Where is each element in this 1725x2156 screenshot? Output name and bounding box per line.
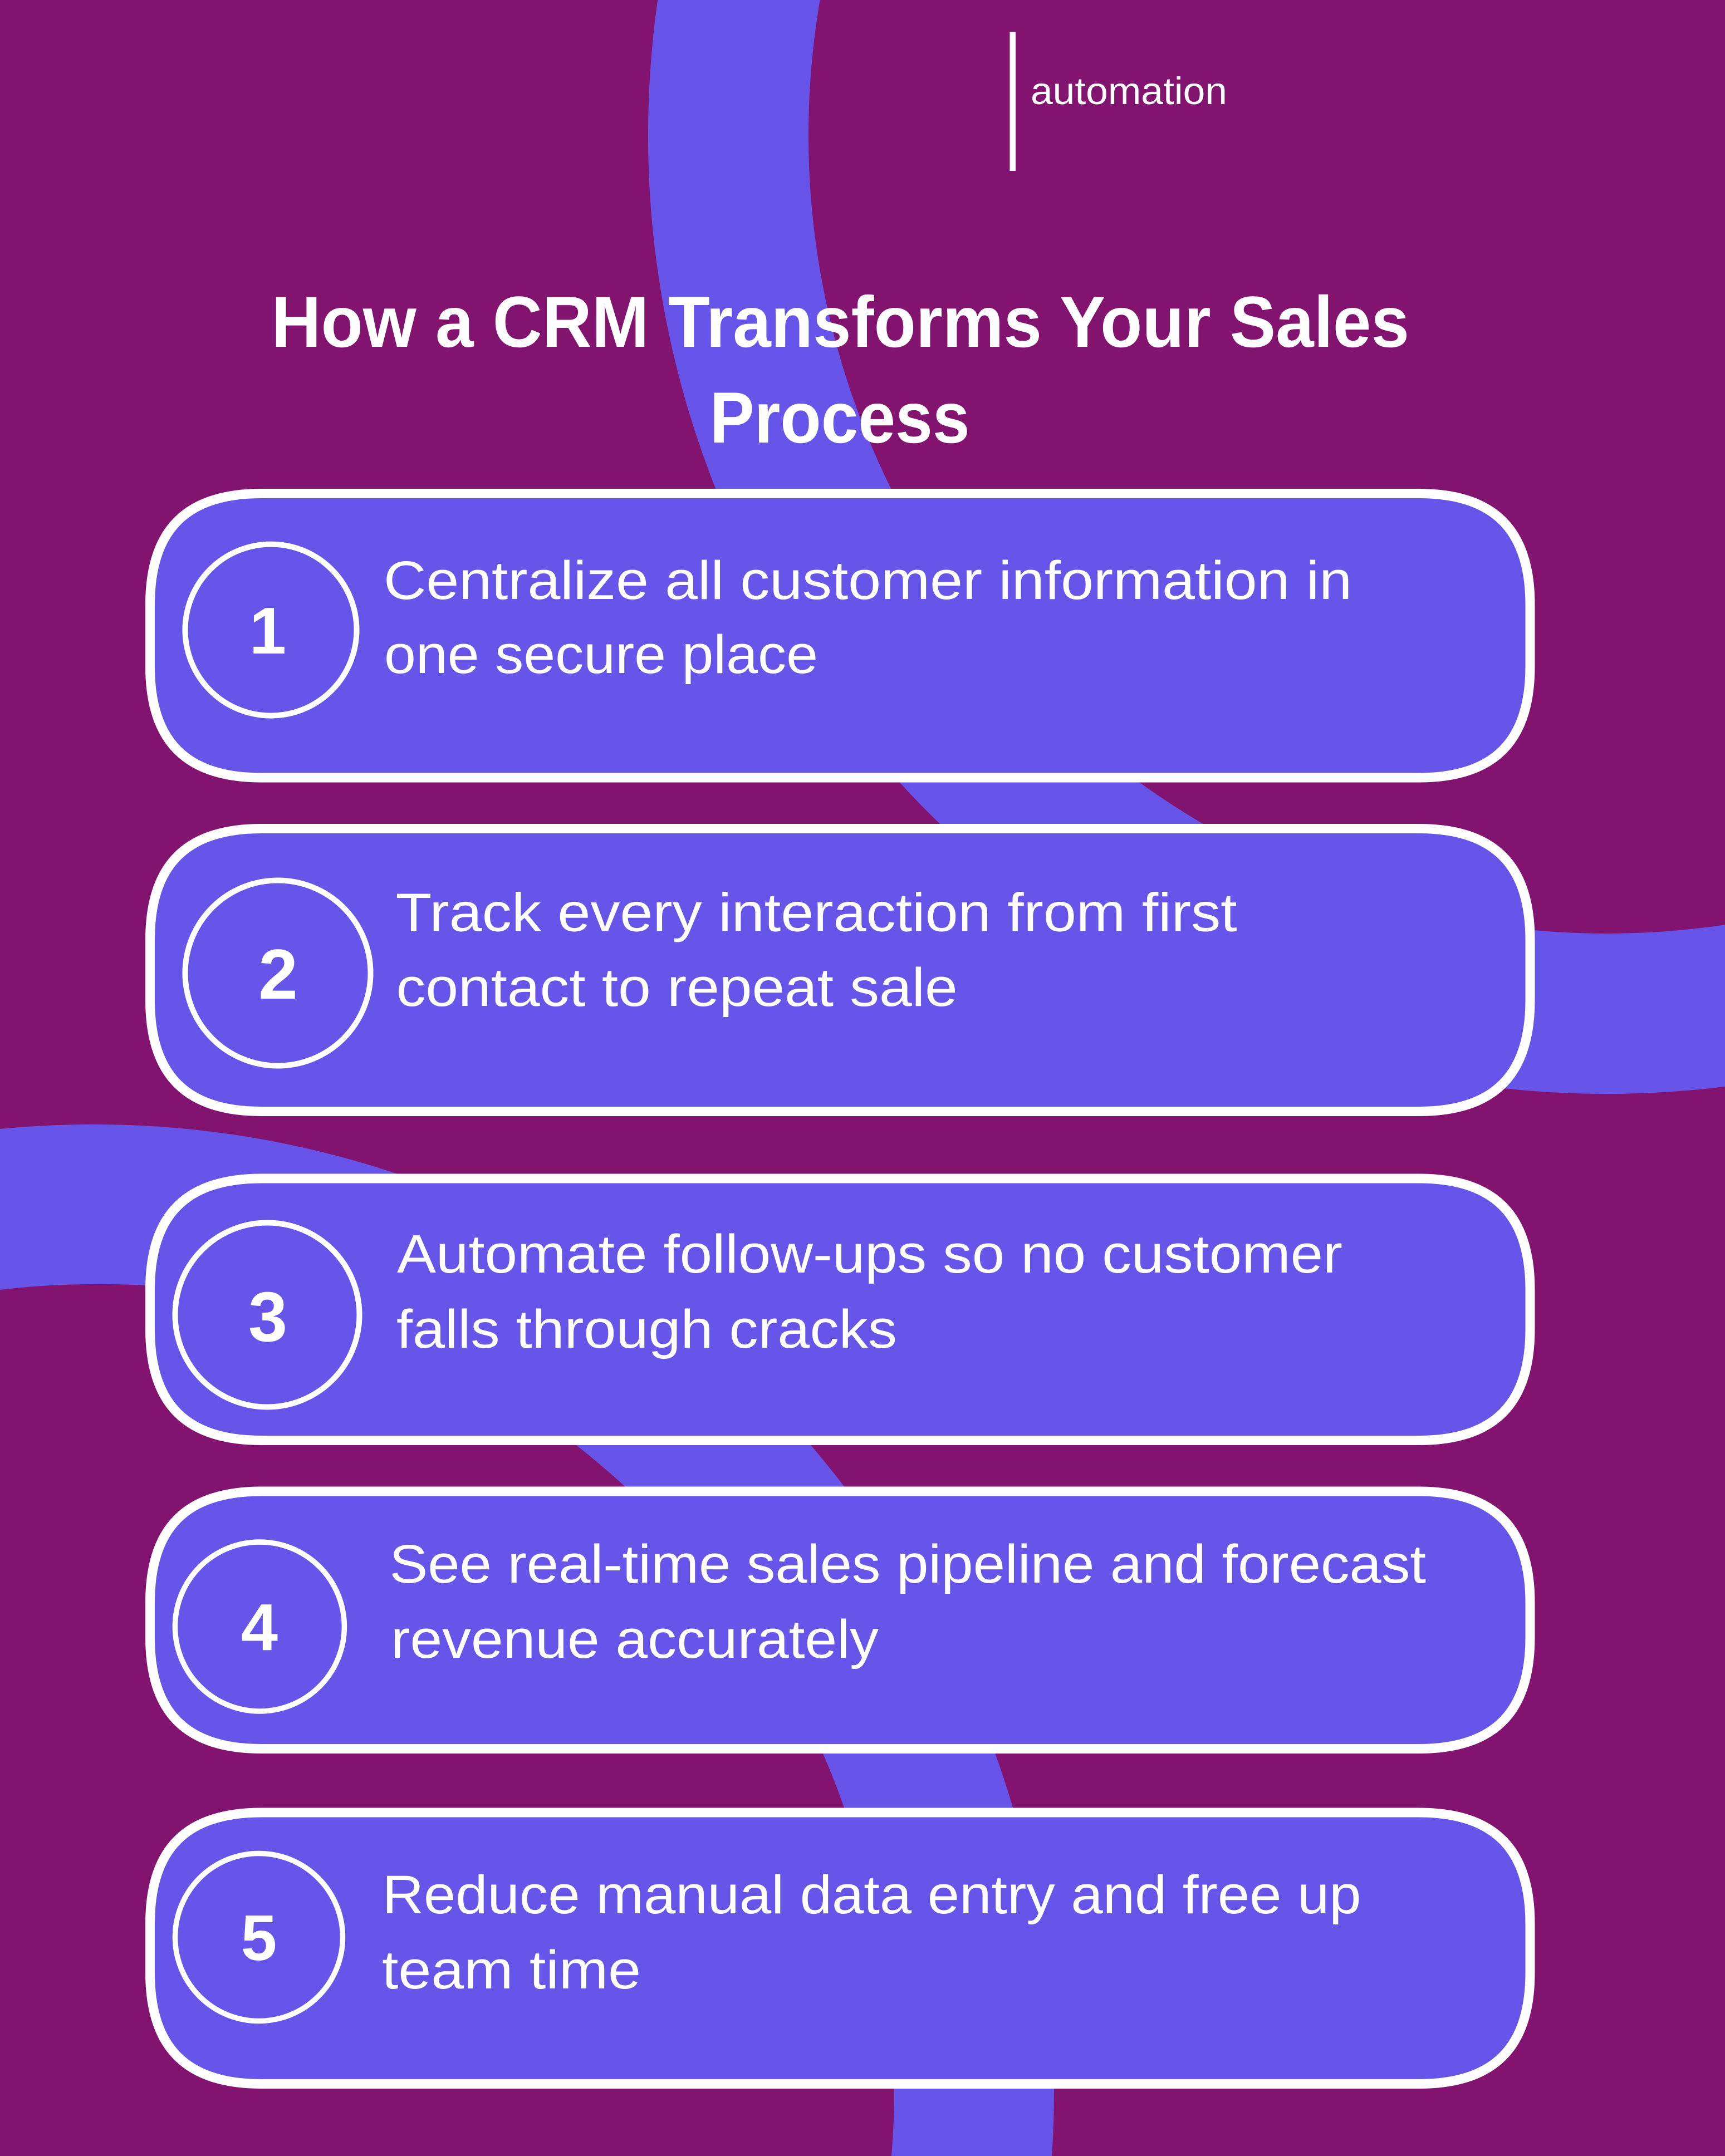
step 3 text [396, 1224, 1342, 1359]
step 4 number badge [175, 1542, 344, 1711]
panel: step 5 [150, 1813, 1530, 2084]
title: Process [710, 377, 970, 458]
step 1 number badge: 1 [249, 594, 286, 668]
step 3 number badge [175, 1222, 360, 1407]
step 1 card [150, 493, 1530, 778]
step 1 number badge [185, 544, 356, 716]
step 2 number badge [185, 881, 371, 1065]
step 3 text: falls through cracks [396, 1299, 897, 1359]
decorative ribbon: upper arc [648, 0, 1725, 1094]
step 5 text: team time [382, 1939, 641, 2000]
step 2 text: Track every interaction from first [396, 882, 1237, 943]
decorative ribbon: lower arc [0, 1124, 1054, 2156]
panel: step 4 [150, 1491, 1530, 1749]
step 1 text [384, 550, 1352, 685]
step 3 card [150, 1178, 1530, 1441]
title: How a CRM Transforms Your Sales [272, 281, 1409, 362]
step 5 number badge [175, 1854, 343, 2021]
step 2 text: contact to repeat sale [396, 957, 958, 1018]
step 5 number badge: 5 [241, 1902, 277, 1974]
step 2 text [396, 882, 1237, 1018]
panel: step 1 [150, 493, 1530, 778]
brand label: automation [1031, 70, 1227, 112]
step 4 number badge: 4 [241, 1590, 278, 1664]
step 3 number badge: 3 [248, 1278, 287, 1356]
step 2 number badge: 2 [258, 935, 298, 1014]
panel: step 2 [150, 828, 1530, 1111]
step 3 text: Automate follow-ups so no customer [397, 1224, 1342, 1284]
panel: step 3 [150, 1178, 1530, 1441]
step 1 text: one secure place [384, 624, 818, 685]
step 1 text: Centralize all customer information in [384, 550, 1352, 611]
step 5 text [382, 1864, 1361, 2000]
step 5 text: Reduce manual data entry and free up [383, 1864, 1361, 1925]
step 2 card [150, 828, 1530, 1111]
step 4 card [150, 1491, 1530, 1749]
step 4 text [390, 1534, 1426, 1669]
title [272, 281, 1409, 458]
step 5 card [150, 1813, 1530, 2084]
step 4 text: See real-time sales pipeline and forecast [390, 1534, 1426, 1594]
step 4 text: revenue accurately [391, 1609, 879, 1669]
logo divider bar [1010, 32, 1016, 171]
